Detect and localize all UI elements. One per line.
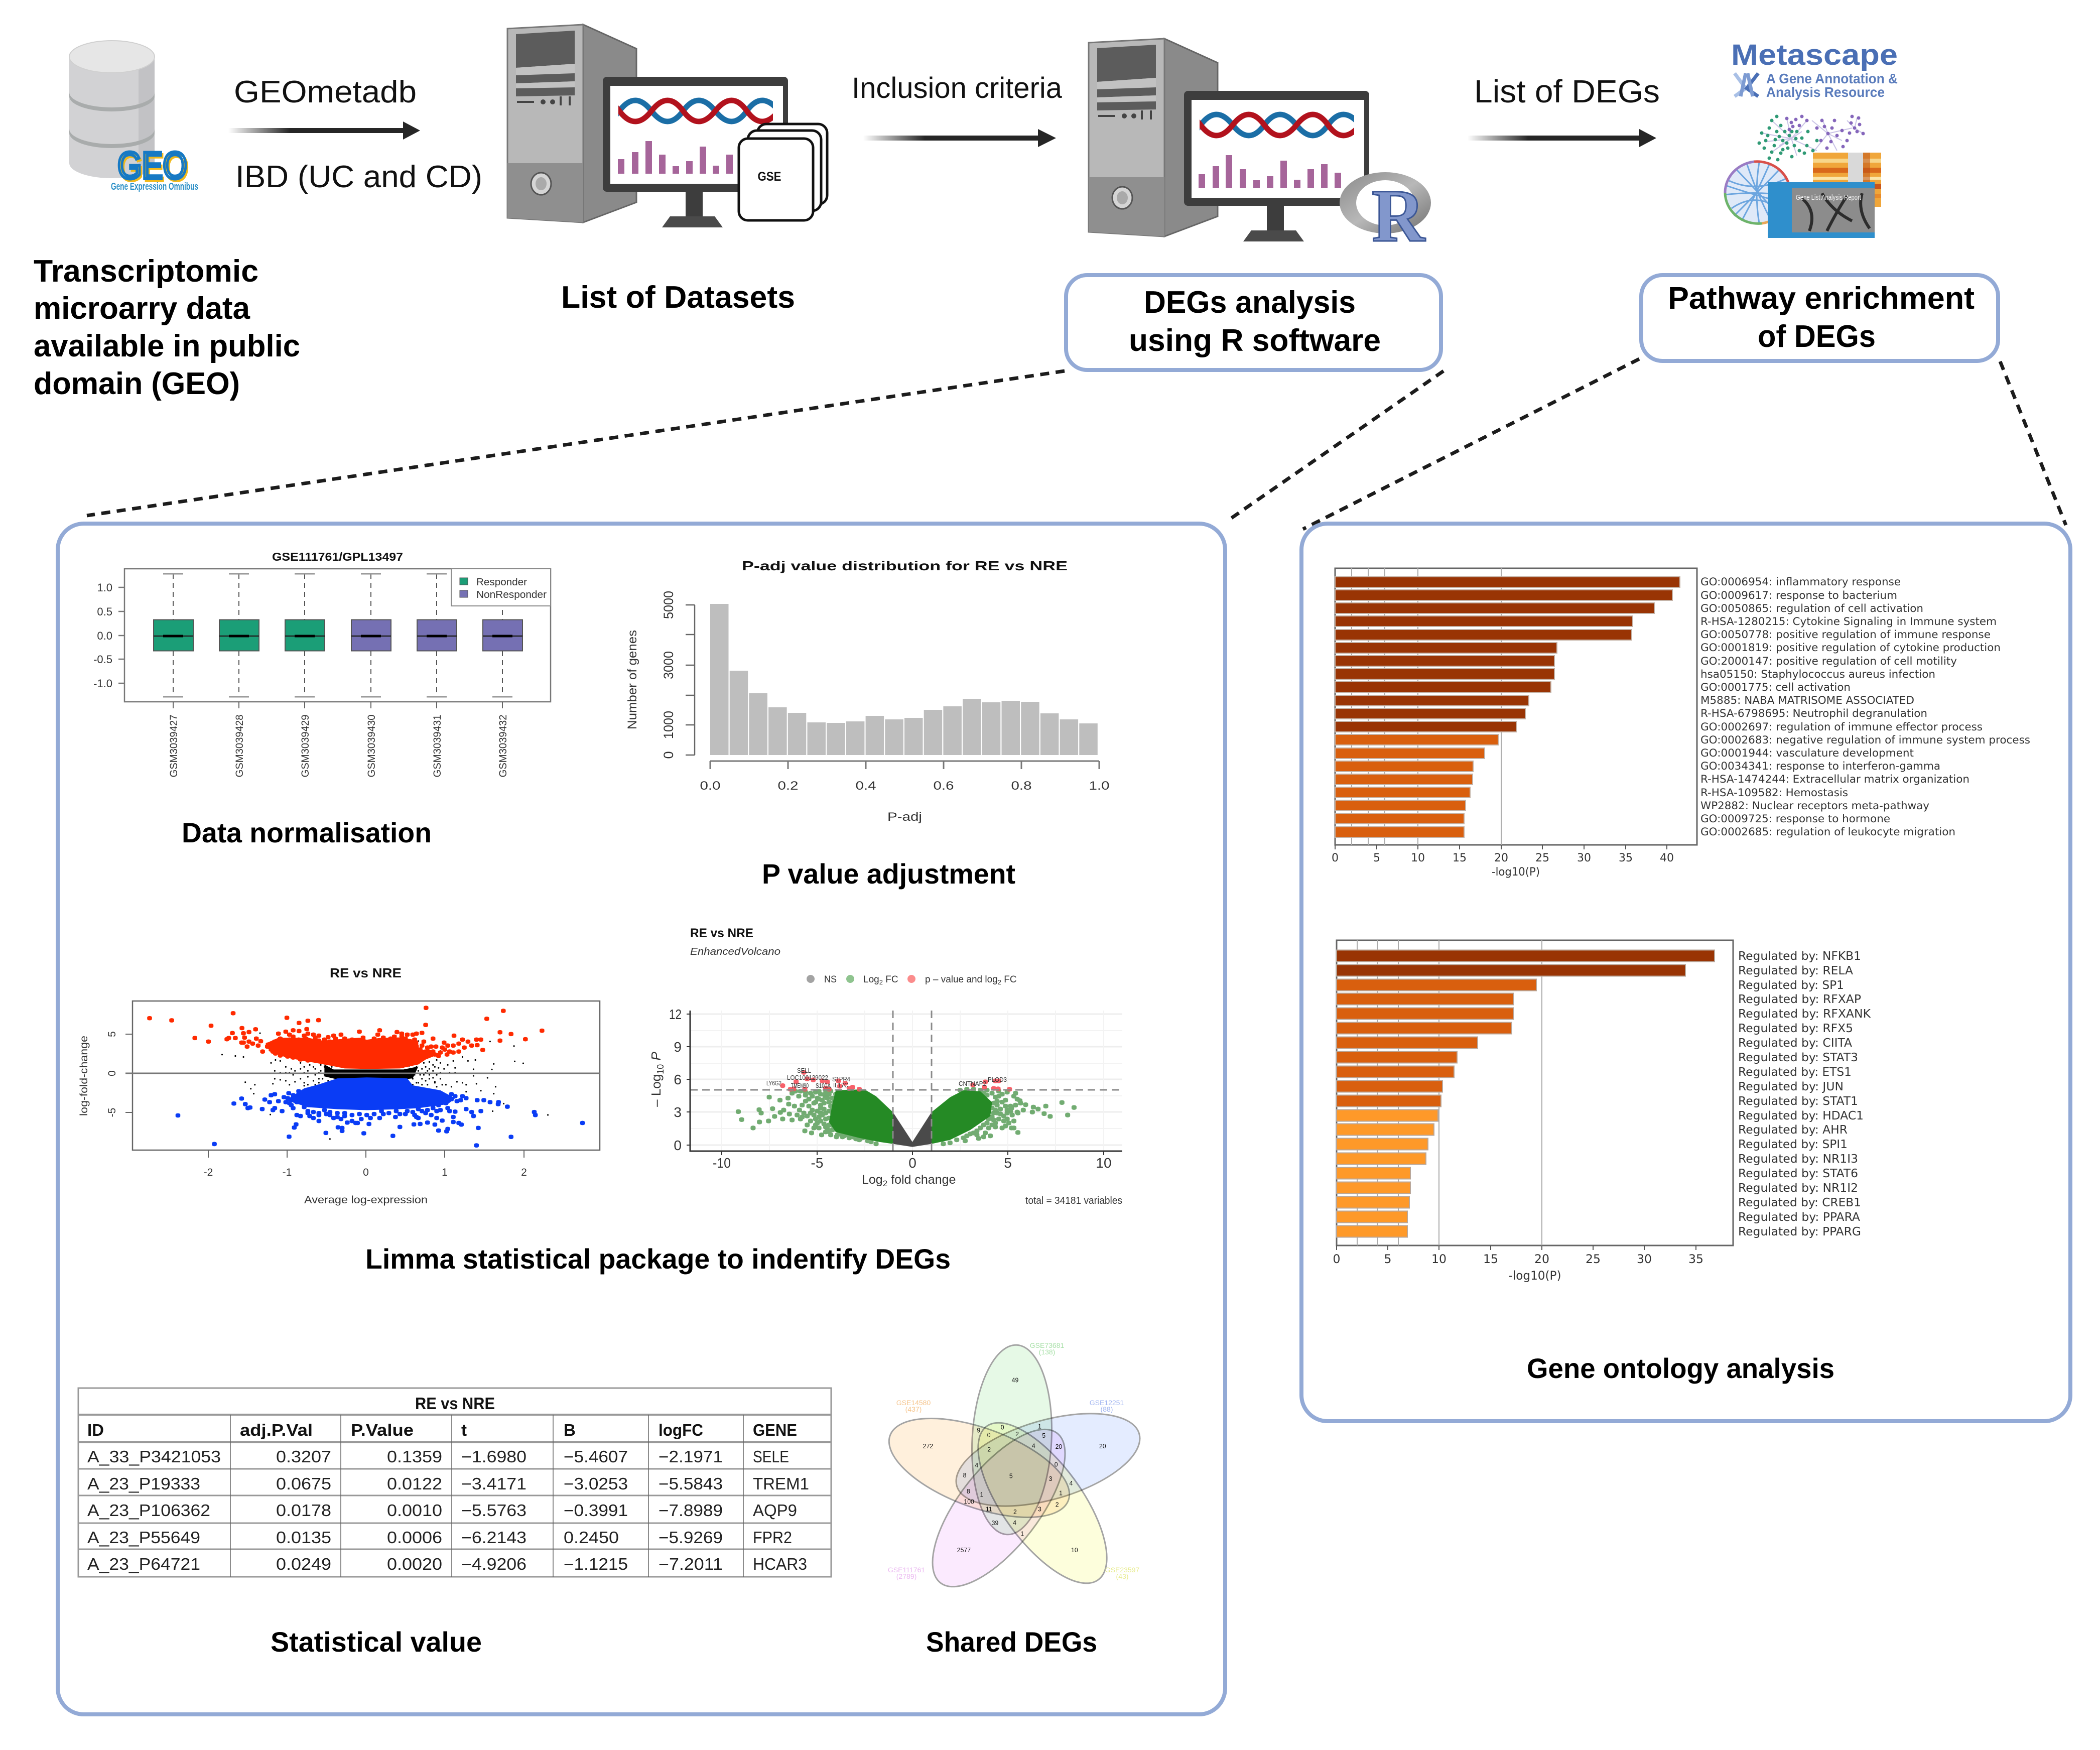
chart: volcano plot: -10 (713, 1155, 731, 1171)
chart: MA plot: 0 (106, 1070, 118, 1076)
chart: five-set Venn diagram: 11 (986, 1506, 992, 1513)
table: statistical values: A_33_P3421053 (87, 1447, 221, 1466)
chart: P-adj histogram: 0.6 (934, 779, 954, 793)
chart: transcription regulators bars: 20 (1534, 1252, 1549, 1266)
legend: FC (883, 974, 898, 985)
chart: pathway enrichment bars: GO:0002697: regulation of immune effector process (1700, 721, 1983, 733)
chart: box plot: GSM3039431 (432, 715, 443, 777)
legend (451, 569, 551, 606)
chart: pathway enrichment bars: GO:2000147: positive regulation of cell motility (1700, 655, 1957, 667)
chart: five-set Venn diagram: 0 (1055, 1461, 1058, 1468)
chart: five-set Venn diagram: 1 (980, 1491, 983, 1498)
legend: 2 (998, 978, 1001, 986)
chart: volcano plot: 5 (1004, 1155, 1012, 1171)
chart: transcription regulators bars: Regulated by: JUN (1738, 1080, 1844, 1093)
chart: transcription regulators bars: 35 (1688, 1252, 1703, 1266)
heading: transcriptomic data (34, 254, 300, 401)
chart: pathway enrichment bars: -log10(P) (1492, 866, 1540, 879)
callout: DEGs analysis (1066, 275, 1441, 370)
chart: volcano plot: RE vs NRE (690, 926, 753, 940)
panel: DEGs analysis (58, 524, 1225, 1714)
chart: MA plot: -2 (204, 1167, 213, 1178)
chart: pathway enrichment bars: R-HSA-6798695: Neutrophil degranulation (1700, 707, 1927, 719)
label: IBD: IBD (UC and CD) (235, 160, 482, 194)
chart: box plot: GSE111761/GPL13497 (272, 550, 403, 563)
chart: five-set Venn diagram: 4 (1032, 1442, 1035, 1450)
legend: NonResponder (476, 589, 547, 600)
legend: FC (1001, 974, 1017, 985)
table: statistical values: TREM1 (753, 1474, 809, 1493)
chart: five-set Venn diagram: 1 (1038, 1423, 1041, 1430)
chart: transcription regulators bars: Regulated by: SP1 (1738, 979, 1844, 992)
chart: volcano plot: 10 (1096, 1155, 1112, 1171)
heading: transcriptomic data: microarry data (34, 291, 250, 326)
table: statistical values: A_23_P55649 (87, 1528, 200, 1547)
chart: MA plot: -5 (106, 1108, 118, 1117)
chart: five-set Venn diagram: 4 (1070, 1479, 1073, 1487)
table: statistical values: RE vs NRE (415, 1394, 495, 1413)
heatmap (1813, 153, 1881, 207)
panel: gene ontology (1301, 524, 2070, 1421)
chart: box plot: GSM3039428 (234, 715, 245, 777)
table: statistical values: −3.4171 (461, 1474, 527, 1493)
table: statistical values: 0.0122 (387, 1474, 442, 1493)
chart: transcription regulators bars: Regulated by: STAT1 (1738, 1095, 1858, 1108)
chart: five-set Venn diagram: 100 (964, 1498, 974, 1506)
arrow: GEO to datasets (228, 121, 420, 140)
chart: pathway enrichment bars: GO:0009617: response to bacterium (1700, 589, 1897, 601)
callout: pathway enrichment: of DEGs (1758, 319, 1876, 354)
network (1759, 116, 1865, 160)
chart: transcription regulators bars: Regulated by: RELA (1738, 964, 1853, 977)
chart: P-adj histogram: 0.4 (855, 779, 876, 793)
chart: transcription regulators bars: 0 (1333, 1252, 1340, 1266)
table: statistical values: B (564, 1421, 576, 1439)
chart: box plot: GSM3039427 (168, 715, 180, 777)
chart: transcription regulators bars: Regulated by: PPARG (1738, 1225, 1861, 1238)
table: statistical values: A_23_P106362 (87, 1501, 210, 1520)
table: statistical values: −7.2011 (659, 1555, 723, 1573)
chart: five-set Venn diagram: 49 (1012, 1377, 1018, 1384)
chart: P-adj histogram: 0.8 (1011, 779, 1032, 793)
icon: GEO database (69, 41, 198, 192)
chart: volcano plot: 0 (674, 1138, 682, 1153)
chart: five-set Venn diagram: GSE14580 (896, 1399, 931, 1407)
chart: five-set Venn diagram: 1 (1059, 1489, 1063, 1496)
gene labels: PLOD3 (988, 1076, 1007, 1083)
chart: pathway enrichment bars: R-HSA-1280215: Cytokine Signaling in Immune system (1700, 615, 1997, 628)
chart: volcano plot: 12 (669, 1007, 682, 1022)
chart: five-set Venn diagram: 4 (975, 1461, 978, 1469)
chart: five-set Venn diagram: 20 (1056, 1443, 1062, 1450)
legend: p – value and log (925, 974, 998, 985)
chart: volcano plot: 3 (674, 1104, 682, 1120)
chart: five-set Venn diagram: 0 (987, 1432, 991, 1439)
chart: transcription regulators bars: Regulated by: NR1I2 (1738, 1182, 1858, 1195)
heading: shared DEGs: Shared DEGs (926, 1626, 1097, 1658)
chart: pathway enrichment bars: GO:0034341: response to interferon-gamma (1700, 760, 1940, 772)
R logo: R (1372, 174, 1426, 258)
chart: pathway enrichment bars: GO:0002683: negative regulation of immune system process (1700, 734, 2030, 746)
chart: box plot: -0.5 (93, 653, 112, 666)
chart: box plot: 0.5 (97, 605, 112, 618)
arrow: datasets to DEG analysis (863, 129, 1056, 147)
chart: five-set Venn diagram: 2 (1013, 1509, 1017, 1516)
screen bars (1199, 155, 1341, 188)
gene labels: S1PR4 (832, 1075, 850, 1083)
table: statistical values: P.Value (351, 1421, 414, 1439)
chart: P-adj histogram: 1.0 (1089, 779, 1109, 793)
table: statistical values: 0.3207 (276, 1447, 331, 1466)
heading: transcriptomic data: available in public (34, 329, 300, 363)
report cover: Gene List Analysis Report (1796, 193, 1862, 202)
chart: transcription regulators bars: Regulated by: HDAC1 (1738, 1109, 1864, 1122)
chart: volcano plot: EnhancedVolcano (690, 946, 780, 957)
chart: volcano plot (648, 926, 1122, 1206)
chart: transcription regulators bars: 25 (1586, 1252, 1601, 1266)
chart: five-set Venn diagram: 2 (987, 1446, 991, 1453)
chart: five-set Venn diagram: GSE73681 (1030, 1341, 1064, 1349)
chart: five-set Venn diagram: (43) (1116, 1572, 1128, 1580)
logo: Metascape: A Gene Annotation & (1766, 71, 1898, 86)
legend (807, 974, 1017, 986)
callout: pathway enrichment (1641, 275, 1998, 361)
chart: pathway enrichment bars: 15 (1453, 852, 1467, 864)
chart: MA plot: -1 (283, 1167, 292, 1178)
chart: transcription regulators bars: 5 (1384, 1252, 1391, 1266)
GEO logo: Gene Expression Omnibus (111, 181, 198, 192)
legend: Log (863, 974, 879, 985)
table: statistical values: 0.0135 (276, 1528, 331, 1547)
chart: transcription regulators bars: Regulated by: SPI1 (1738, 1138, 1848, 1151)
chart: transcription regulators bars: Regulated by: RFX5 (1738, 1022, 1853, 1035)
chart: pathway enrichment bars: GO:0001944: vasculature development (1700, 747, 1914, 759)
heading: list of datasets: List of Datasets (561, 280, 795, 315)
table: statistical values: logFC (659, 1421, 703, 1439)
chart: MA plot: RE vs NRE (330, 965, 402, 980)
logo: Metascape: Metascape (1731, 39, 1898, 71)
R logo (1340, 172, 1431, 258)
chart: pathway enrichment bars: 30 (1577, 852, 1591, 864)
chart: transcription regulators bars: Regulated by: AHR (1738, 1123, 1848, 1137)
chart: five-set Venn diagram: 39 (992, 1520, 998, 1527)
chart: P-adj histogram: 0.2 (778, 779, 798, 793)
label: list of DEGs: List of DEGs (1474, 73, 1660, 109)
chart: transcription regulators bars: Regulated by: STAT6 (1738, 1167, 1858, 1180)
chart: box plot: 1.0 (97, 581, 112, 594)
GSE cards (739, 124, 827, 220)
chart: volcano plot: total = 34181 variables (1025, 1195, 1122, 1206)
table: statistical values: 0.2450 (564, 1528, 619, 1547)
table: statistical values: GENE (753, 1421, 797, 1439)
heading: data normalisation: Data normalisation (182, 817, 432, 848)
chart: pathway enrichment bars: GO:0050865: regulation of cell activation (1700, 602, 1923, 614)
chart: pathway enrichment bars: R-HSA-1474244: Extracellular matrix organization (1700, 773, 1970, 785)
table: statistical values: AQP9 (753, 1501, 797, 1520)
chart: MA plot: log-fold-change (78, 1036, 90, 1116)
gene labels: LY6G2 (766, 1079, 781, 1087)
chart: pathway enrichment bars: 5 (1373, 852, 1380, 864)
chart: transcription regulators bars: 10 (1431, 1252, 1447, 1266)
chart: pathway enrichment bars: 10 (1411, 852, 1425, 864)
table: statistical values: −3.0253 (564, 1474, 628, 1493)
chart: transcription regulators bars (1333, 940, 1871, 1283)
table: statistical values: t (461, 1421, 467, 1439)
chart: pathway enrichment bars: hsa05150: Staphylococcus aureus infection (1700, 668, 1935, 680)
table: statistical values: 0.0178 (276, 1501, 331, 1520)
chart: transcription regulators bars: -log10(P) (1509, 1269, 1561, 1283)
chart: transcription regulators bars: 15 (1483, 1252, 1498, 1266)
table: statistical values: −5.5843 (659, 1474, 723, 1493)
chart: box plot: 0.0 (97, 630, 112, 642)
label: inclusion criteria: Inclusion criteria (852, 72, 1063, 104)
chart: volcano plot: 2 (883, 1179, 887, 1188)
table: statistical values (78, 1388, 831, 1577)
callout: DEGs analysis: using R software (1129, 323, 1381, 358)
chart: pathway enrichment bars: GO:0001819: positive regulation of cytokine production (1700, 642, 2001, 654)
chart: transcription regulators bars: 30 (1637, 1252, 1652, 1266)
circular plot (1724, 162, 1790, 224)
table: statistical values: 0.0675 (276, 1474, 331, 1493)
icon: computer with datasets (507, 25, 827, 227)
gene labels: TMEM90 (791, 1082, 809, 1089)
chart: pathway enrichment bars: GO:0002685: regulation of leukocyte migration (1700, 826, 1955, 838)
table: statistical values: −1.6980 (461, 1447, 527, 1466)
table: statistical values: −5.4607 (564, 1447, 628, 1466)
gene labels: SELL (797, 1067, 811, 1074)
chart: five-set Venn diagram: 20 (1099, 1443, 1106, 1450)
dashed connectors (87, 359, 2066, 529)
chart: five-set Venn diagram: GSE12251 (1090, 1399, 1124, 1407)
gene labels (766, 1067, 1007, 1089)
GEO logo: GEO (117, 145, 187, 187)
table: statistical values: ID (87, 1421, 104, 1439)
chart: box plot (93, 550, 551, 777)
chart: P-adj histogram (625, 558, 1109, 824)
chart: P-adj histogram: Number of genes (625, 630, 639, 729)
heading: P value adjustment: P value adjustment (762, 858, 1015, 890)
legend: 2 (879, 978, 883, 986)
chart: five-set Venn diagram: 10 (1071, 1547, 1078, 1554)
chart: MA plot: 1 (442, 1167, 448, 1178)
chart: five-set Venn diagram: 2 (1015, 1430, 1019, 1438)
chart: five-set Venn diagram: 8 (963, 1472, 966, 1479)
table: statistical values: −4.9206 (461, 1555, 527, 1573)
heading: transcriptomic data: domain (GEO) (34, 366, 240, 401)
arrow: DEGs to Metascape (1468, 129, 1656, 147)
chart: P-adj histogram: 1000 (661, 711, 676, 739)
table: statistical values: −1.1215 (564, 1555, 628, 1573)
table: statistical values: −6.2143 (461, 1528, 527, 1547)
chart: transcription regulators bars: Regulated by: RFXAP (1738, 993, 1861, 1006)
table: statistical values: −5.5763 (461, 1501, 527, 1520)
chart: pathway enrichment bars: M5885: NABA MATRISOME ASSOCIATED (1700, 694, 1914, 706)
chart: box plot: GSM3039432 (497, 715, 509, 777)
chart: pathway enrichment bars: R-HSA-109582: Hemostasis (1700, 787, 1848, 799)
chart: MA plot: Average log-expression (304, 1194, 428, 1206)
chart: MA plot: 2 (521, 1167, 527, 1178)
table: statistical values: SELE (753, 1447, 789, 1466)
chart: volcano plot: 10 (655, 1064, 666, 1074)
logo: Metascape (1731, 39, 1898, 100)
chart: transcription regulators bars: Regulated by: RFXANK (1738, 1008, 1871, 1021)
chart: P-adj histogram: P-adj value distribution for RE vs NRE (742, 558, 1068, 573)
chart: pathway enrichment bars: 35 (1619, 852, 1633, 864)
chart: P-adj histogram: 3000 (661, 651, 676, 679)
chart: P-adj histogram: 0 (661, 751, 676, 759)
chart: volcano plot: 9 (674, 1039, 682, 1055)
chart: five-set Venn diagram: GSE23597 (1105, 1566, 1139, 1574)
chart: pathway enrichment bars: WP2882: Nuclear receptors meta-pathway (1700, 800, 1929, 812)
table: statistical values: 0.1359 (387, 1447, 442, 1466)
table: statistical values: −5.9269 (659, 1528, 723, 1547)
chart: five-set Venn diagram (876, 1341, 1150, 1607)
gene labels: S100A (816, 1082, 831, 1089)
chart: MA plot: 0 (363, 1167, 369, 1178)
screen bars (618, 141, 733, 174)
legend: NS (824, 974, 837, 985)
gene labels: IL17C (833, 1081, 848, 1089)
table: statistical values: FPR2 (753, 1528, 792, 1547)
chart: MA plot: 5 (106, 1031, 118, 1037)
chart: five-set Venn diagram: (437) (905, 1405, 922, 1413)
chart: five-set Venn diagram: 8 (967, 1487, 970, 1495)
icon: Metascape report collage (1724, 116, 1881, 238)
chart: volcano plot: – Log (648, 1074, 664, 1107)
table: statistical values: A_23_P19333 (87, 1474, 200, 1493)
chart: P-adj histogram: 5000 (661, 591, 676, 619)
chart: five-set Venn diagram: 5 (1009, 1472, 1013, 1480)
chart: pathway enrichment bars: GO:0001775: cell activation (1700, 681, 1851, 693)
chart: pathway enrichment bars (1332, 568, 2030, 879)
chart: pathway enrichment bars: 40 (1660, 852, 1674, 864)
chart: five-set Venn diagram: 3 (1049, 1475, 1053, 1482)
chart: volcano plot: 0 (908, 1155, 916, 1171)
chart: transcription regulators bars: Regulated by: CIITA (1738, 1037, 1852, 1050)
chart: five-set Venn diagram: 272 (923, 1443, 933, 1450)
chart: five-set Venn diagram: 1 (1020, 1530, 1024, 1537)
gene labels: LOC100129022 (787, 1074, 828, 1081)
report cover (1768, 182, 1875, 238)
chart: volcano plot: fold change (887, 1173, 956, 1187)
GSE cards: GSE (758, 170, 781, 184)
table: statistical values: 0.0010 (387, 1501, 442, 1520)
chart: five-set Venn diagram: 2577 (957, 1547, 971, 1554)
chart: box plot: GSM3039429 (300, 715, 311, 777)
chart: five-set Venn diagram: GSE111761 (888, 1566, 925, 1574)
chart: box plot: -1.0 (93, 677, 112, 690)
legend: Responder (476, 577, 527, 588)
table: statistical values: −7.8989 (659, 1501, 723, 1520)
gene labels: CNTNAP2 (959, 1080, 986, 1087)
chart: five-set Venn diagram: (88) (1101, 1405, 1113, 1413)
chart: transcription regulators bars: Regulated by: NR1I3 (1738, 1153, 1858, 1166)
callout: DEGs analysis: DEGs analysis (1144, 285, 1356, 320)
table: statistical values: HCAR3 (753, 1555, 807, 1573)
chart: five-set Venn diagram: 5 (1042, 1432, 1045, 1439)
chart: five-set Venn diagram: (2789) (896, 1572, 916, 1580)
heading: gene ontology analysis: Gene ontology analysis (1527, 1352, 1834, 1384)
chart: P-adj histogram: 0.0 (700, 779, 721, 793)
table: statistical values: 0.0006 (387, 1528, 442, 1547)
chart: box plot: GSM3039430 (366, 715, 377, 777)
chart: volcano plot: P (648, 1052, 664, 1064)
chart: volcano plot: -5 (811, 1155, 823, 1171)
GEO logo: GEO (119, 147, 189, 189)
callout: pathway enrichment: Pathway enrichment (1668, 281, 1975, 316)
chart: pathway enrichment bars: 25 (1535, 852, 1549, 864)
heading: statistical value: Statistical value (271, 1626, 482, 1658)
chart: transcription regulators bars: Regulated by: NFKB1 (1738, 950, 1861, 963)
chart: transcription regulators bars: Regulated by: ETS1 (1738, 1066, 1852, 1079)
table: statistical values: −0.3991 (564, 1501, 628, 1520)
table: statistical values: A_23_P64721 (87, 1555, 200, 1573)
chart: volcano plot: Log (862, 1173, 883, 1187)
chart: five-set Venn diagram: 9 (977, 1427, 980, 1434)
logo: Metascape: Analysis Resource (1766, 84, 1885, 100)
chart: five-set Venn diagram: 3 (1038, 1506, 1041, 1513)
heading: transcriptomic data: Transcriptomic (34, 254, 258, 289)
chart: five-set Venn diagram: 4 (1013, 1519, 1016, 1527)
chart: pathway enrichment bars: 0 (1332, 852, 1339, 864)
chart: transcription regulators bars: Regulated by: STAT3 (1738, 1051, 1858, 1064)
chart: five-set Venn diagram: 0 (1001, 1424, 1004, 1431)
chart: five-set Venn diagram: 2 (1056, 1501, 1059, 1509)
table: statistical values: 0.0020 (387, 1555, 442, 1573)
chart: MA plot (78, 965, 600, 1206)
table: statistical values: −2.1971 (659, 1447, 723, 1466)
chart: transcription regulators bars: Regulated by: PPARA (1738, 1211, 1860, 1224)
chart: volcano plot: 6 (674, 1072, 682, 1087)
chart: pathway enrichment bars: GO:0006954: inflammatory response (1700, 576, 1901, 588)
icon: computer with R (1089, 39, 1431, 258)
chart: pathway enrichment bars: GO:0050778: positive regulation of immune response (1700, 629, 1991, 641)
chart: pathway enrichment bars: 20 (1494, 852, 1508, 864)
heading: Limma: Limma statistical package to indentify DEGs (365, 1243, 951, 1275)
table: statistical values: adj.P.Val (240, 1421, 313, 1439)
chart: pathway enrichment bars: GO:0009725: response to hormone (1700, 813, 1890, 825)
chart: transcription regulators bars: Regulated by: CREB1 (1738, 1196, 1861, 1209)
table: statistical values: 0.0249 (276, 1555, 331, 1573)
label: GEOmetadb: GEOmetadb (234, 75, 417, 109)
chart: five-set Venn diagram: (138) (1039, 1348, 1055, 1356)
chart: P-adj histogram: P-adj (887, 810, 922, 824)
